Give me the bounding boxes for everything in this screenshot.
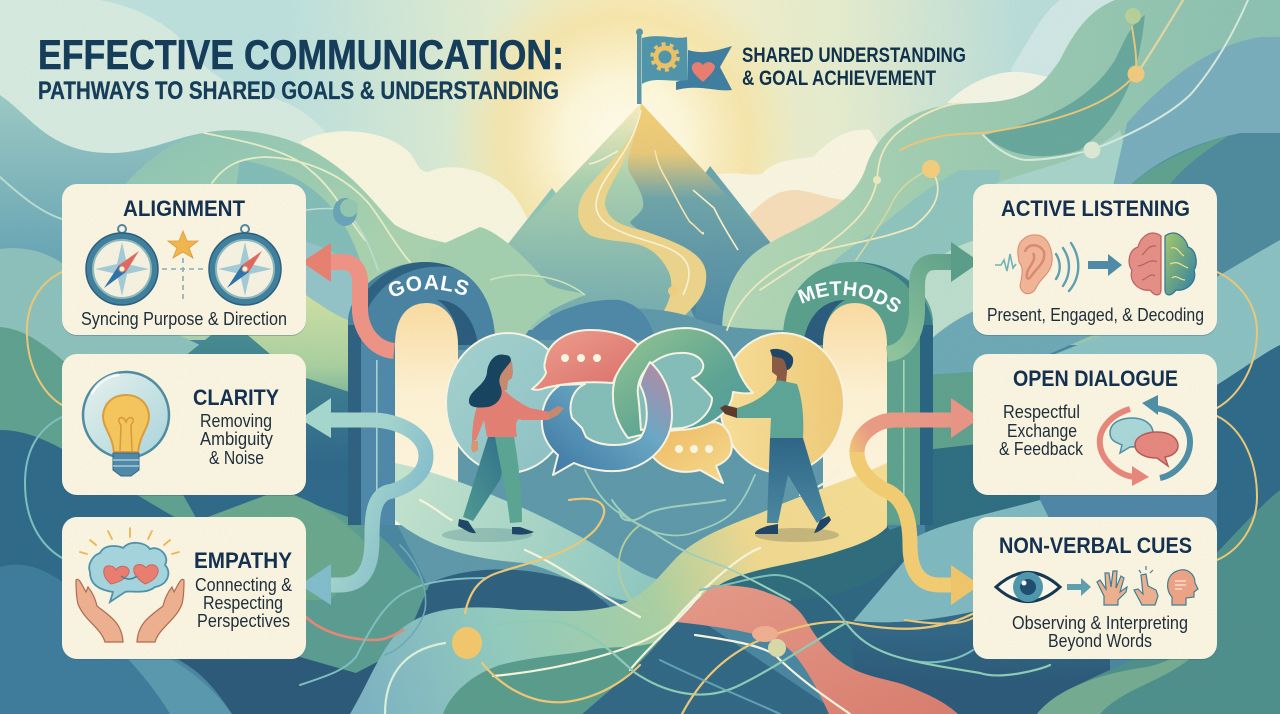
red speech bubble <box>532 330 638 390</box>
panel: open dialogue <box>973 354 1217 496</box>
center floor <box>395 308 887 600</box>
subtitle: PATHWAYS TO SHARED GOALS & UNDERSTANDING <box>38 77 559 105</box>
path node: left hub <box>333 198 358 226</box>
summit flag icon <box>636 28 732 104</box>
title: EFFECTIVE COMMUNICATION: <box>38 31 564 78</box>
panel: open dialogue: Exchange <box>1007 421 1077 441</box>
path node: coral river <box>752 626 786 657</box>
icon: brain <box>1129 233 1196 295</box>
path node: bottom hub <box>452 627 482 659</box>
panel: open dialogue: & Feedback <box>999 439 1084 459</box>
panel: alignment <box>62 184 306 336</box>
winding paths <box>350 463 958 714</box>
panel: active listening <box>973 184 1217 336</box>
arrow: methods to open dialogue <box>857 398 980 585</box>
arrow: methods to non-verbal cues <box>951 565 980 605</box>
road <box>578 103 706 325</box>
icon: alignment guides <box>162 258 205 302</box>
icon: eye <box>996 572 1060 602</box>
panel: non-verbal cues: Observing & Interpreting <box>1012 613 1188 633</box>
interlocked speech bubbles <box>532 328 753 483</box>
panel: open dialogue: Respectful <box>1003 402 1080 422</box>
panel: active listening: ACTIVE LISTENING <box>1001 196 1190 221</box>
yellow speech bubble <box>648 422 732 483</box>
icon: arrow to gestures <box>1067 578 1091 596</box>
icon: dialogue cycle <box>1100 395 1190 486</box>
icon: star <box>168 231 198 258</box>
goal statement: & GOAL ACHIEVEMENT <box>742 67 936 90</box>
arrow: goals to alignment <box>302 243 394 351</box>
icon: compass left <box>86 225 158 305</box>
blue ring bubble <box>542 362 672 475</box>
mountain <box>480 103 790 330</box>
person circle: right <box>720 333 844 473</box>
arrow: goals to clarity and empathy <box>300 398 426 605</box>
panel: empathy: Perspectives <box>197 611 290 631</box>
panel: non-verbal cues <box>973 517 1217 660</box>
icon: arrow to brain <box>1088 254 1122 276</box>
arch: methods <box>783 262 933 525</box>
right column hills <box>905 235 1000 345</box>
panel: clarity: CLARITY <box>193 385 279 410</box>
goal statement: SHARED UNDERSTANDING <box>742 44 966 67</box>
panel: empathy: Connecting & <box>195 575 292 595</box>
panel: empathy <box>62 517 306 660</box>
icon: head profile <box>1168 570 1198 605</box>
panel: clarity <box>62 354 306 496</box>
person: man walking <box>720 349 839 542</box>
panel: clarity: Removing <box>200 411 272 431</box>
icon: cloud with hearts and hands <box>76 528 184 642</box>
person: woman walking <box>442 354 564 542</box>
panel: open dialogue: OPEN DIALOGUE <box>1013 366 1178 391</box>
label: methods: METHODS <box>798 281 901 312</box>
panel: empathy: EMPATHY <box>194 548 292 573</box>
icon: compass right <box>209 225 281 305</box>
goal statement <box>742 44 966 90</box>
title <box>38 31 564 105</box>
panel: active listening: Present, Engaged, & Decoding <box>987 305 1204 325</box>
panel: empathy: Respecting <box>203 593 283 613</box>
icon: light bulb <box>83 372 169 476</box>
panel: clarity: Ambiguity <box>200 429 273 449</box>
green ring bubble <box>613 328 753 438</box>
panel: non-verbal cues: NON-VERBAL CUES <box>999 533 1192 558</box>
left column hills <box>0 248 300 460</box>
panel: clarity: & Noise <box>209 448 264 468</box>
icon: pointing hand <box>1134 566 1158 605</box>
icon: open hand <box>1097 571 1127 605</box>
panel: non-verbal cues: Beyond Words <box>1048 631 1152 651</box>
panel: alignment: Syncing Purpose & Direction <box>81 309 287 329</box>
panel: alignment: ALIGNMENT <box>123 196 246 221</box>
label: goals: GOALS <box>388 275 468 296</box>
path node: top right <box>873 8 1144 184</box>
arrow: methods to active listening <box>887 242 980 354</box>
arch: goals <box>348 262 495 525</box>
person circle: left <box>446 333 570 473</box>
icon: ear and sound waves <box>995 235 1078 294</box>
